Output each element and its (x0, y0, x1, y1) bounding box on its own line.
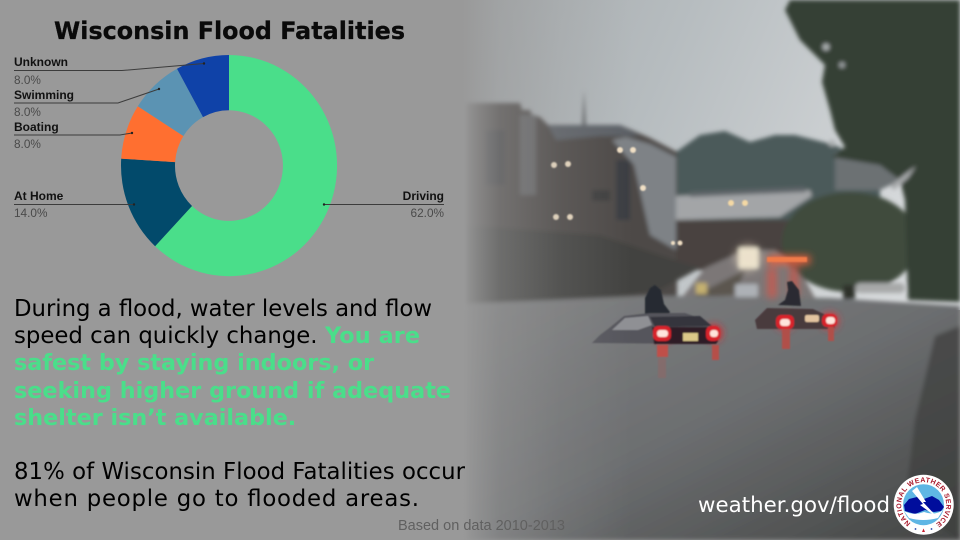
legend: Boating: 8.0% (14, 137, 41, 151)
text block: flood safety message: seeking higher ground if adequate (14, 378, 451, 404)
text block: statistic: 81% of Wisconsin Flood Fatalities occur (14, 459, 466, 485)
legend: Boating (14, 120, 133, 151)
right car (755, 308, 837, 329)
right tree (785, 0, 960, 302)
photo: flooded street with stranded cars (440, 0, 960, 540)
text block: flood safety message (14, 296, 451, 431)
icon: National Weather Service logo: NATIONAL WEATHER SERVICE (896, 477, 952, 528)
far tree line (676, 131, 880, 230)
legend: Swimming (14, 88, 160, 119)
legend: Unknown: 8.0% (14, 73, 41, 87)
left car (592, 313, 718, 344)
legend: At Home: 14.0% (14, 206, 48, 220)
water (465, 296, 960, 540)
text block: statistic (14, 459, 466, 512)
legend: Driving: 62.0% (411, 206, 445, 220)
stranded person on right car (778, 281, 801, 306)
text block: flood safety message: shelter isn’t available. (14, 405, 296, 431)
legend: Driving: Driving (403, 189, 444, 203)
slice: Boating 8% (121, 106, 183, 162)
apartment buildings (465, 103, 677, 300)
donut chart (121, 55, 337, 276)
title: Wisconsin Flood Fatalities (54, 17, 405, 45)
bridge (676, 190, 812, 220)
text block: statistic: when people go to flooded areas. (14, 486, 419, 512)
text block: flood safety message: safest by staying indoors, or (14, 350, 374, 376)
legend: Swimming: Swimming (14, 88, 74, 102)
slice: Unknown 8% (177, 55, 229, 117)
slice: At Home 14% (121, 159, 192, 246)
tree leaf gaps (822, 44, 830, 50)
text block: flood safety message: speed can quickly change. (14, 323, 318, 349)
legend: Unknown (14, 55, 205, 87)
legend: At Home: At Home (14, 189, 64, 203)
slice: Swimming 8% (138, 69, 203, 136)
stranded person on left car (645, 285, 670, 317)
legend: Boating: Boating (14, 120, 59, 134)
distant lights (739, 248, 758, 268)
legend: Swimming: 8.0% (14, 105, 41, 119)
mid tree (782, 192, 918, 292)
dark vegetation at street level (465, 225, 700, 305)
source note: Based on data 2010-2013 (398, 518, 565, 534)
website link: weather.gov/flood (698, 493, 890, 518)
slice: Driving 62% (155, 55, 337, 276)
text block: flood safety message: You are (324, 323, 420, 349)
text block: flood safety message: During a flood, water levels and flow (14, 296, 432, 322)
legend: Driving (323, 189, 445, 220)
legend: At Home (14, 189, 135, 220)
legend: Unknown: Unknown (14, 55, 68, 69)
photo fade into grey panel (462, 0, 632, 540)
